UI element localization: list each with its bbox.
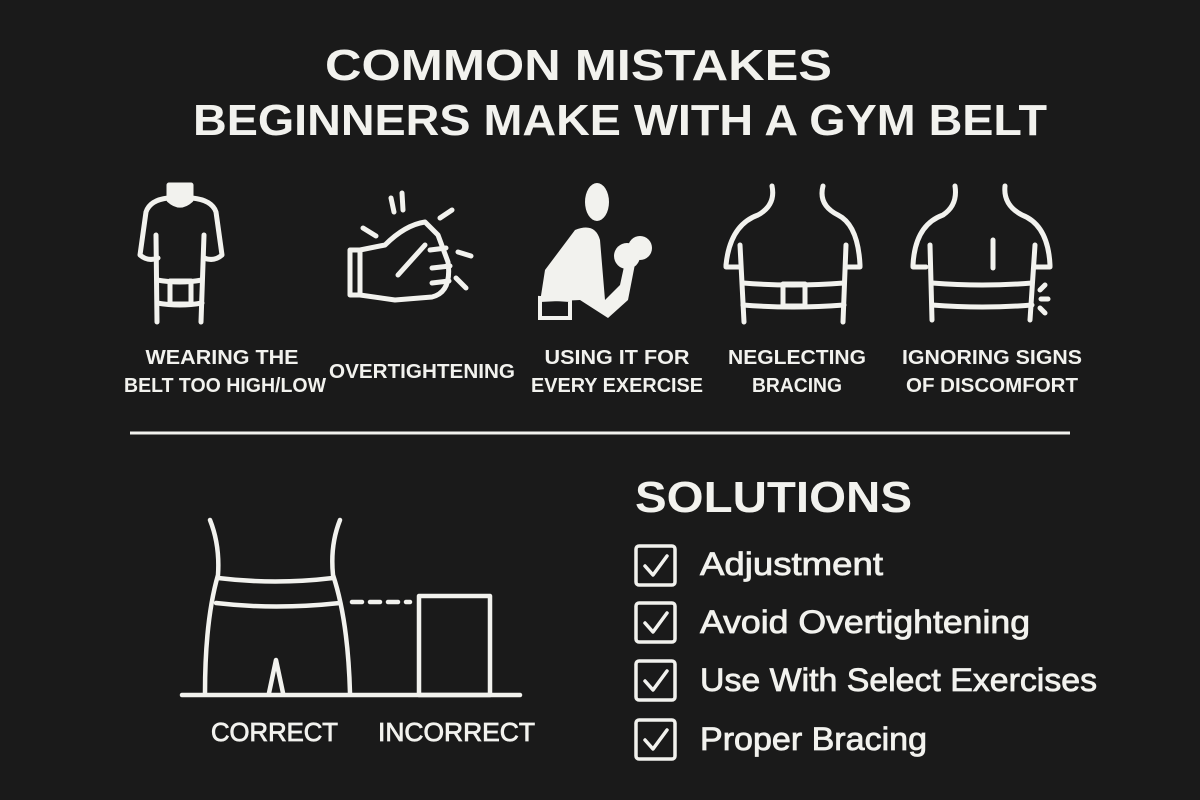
mistake labels: WEARING THE [146, 347, 298, 369]
diagram labels [211, 717, 535, 747]
icon: clenched fist [350, 193, 471, 300]
title: COMMON MISTAKES [325, 41, 832, 90]
icon: shirt with belt too high/low [140, 185, 222, 322]
solutions checklist: Use With Select Exercises [700, 662, 1097, 698]
mistake labels: EVERY EXERCISE [531, 375, 703, 397]
mistake labels: IGNORING SIGNS [902, 347, 1082, 369]
solutions heading: SOLUTIONS [635, 473, 912, 522]
mistake labels: BELT TOO HIGH/LOW [124, 375, 326, 397]
mistake labels [124, 347, 1082, 397]
icon: back with discomfort [913, 186, 1050, 320]
title: BEGINNERS MAKE WITH A GYM BELT [193, 96, 1047, 145]
mistake labels: BRACING [752, 375, 842, 397]
mistake labels: NEGLECTING [728, 347, 866, 369]
solutions checklist: Avoid Overtightening [700, 604, 1030, 640]
diagram: correct vs incorrect belt position [182, 520, 520, 695]
mistake labels: OVERTIGHTENING [329, 361, 515, 383]
mistake labels: OF DISCOMFORT [906, 375, 1078, 397]
title [193, 41, 1047, 145]
solutions checklist: Adjustment [700, 546, 883, 582]
diagram labels: INCORRECT [378, 717, 535, 747]
solutions checklist [636, 546, 1097, 759]
icon: torso neglecting bracing [726, 186, 860, 322]
solutions checklist: Proper Bracing [700, 721, 927, 757]
mistake labels: USING IT FOR [544, 347, 690, 369]
diagram labels: CORRECT [211, 717, 338, 747]
icon: person doing dumbbell curl [540, 183, 652, 318]
